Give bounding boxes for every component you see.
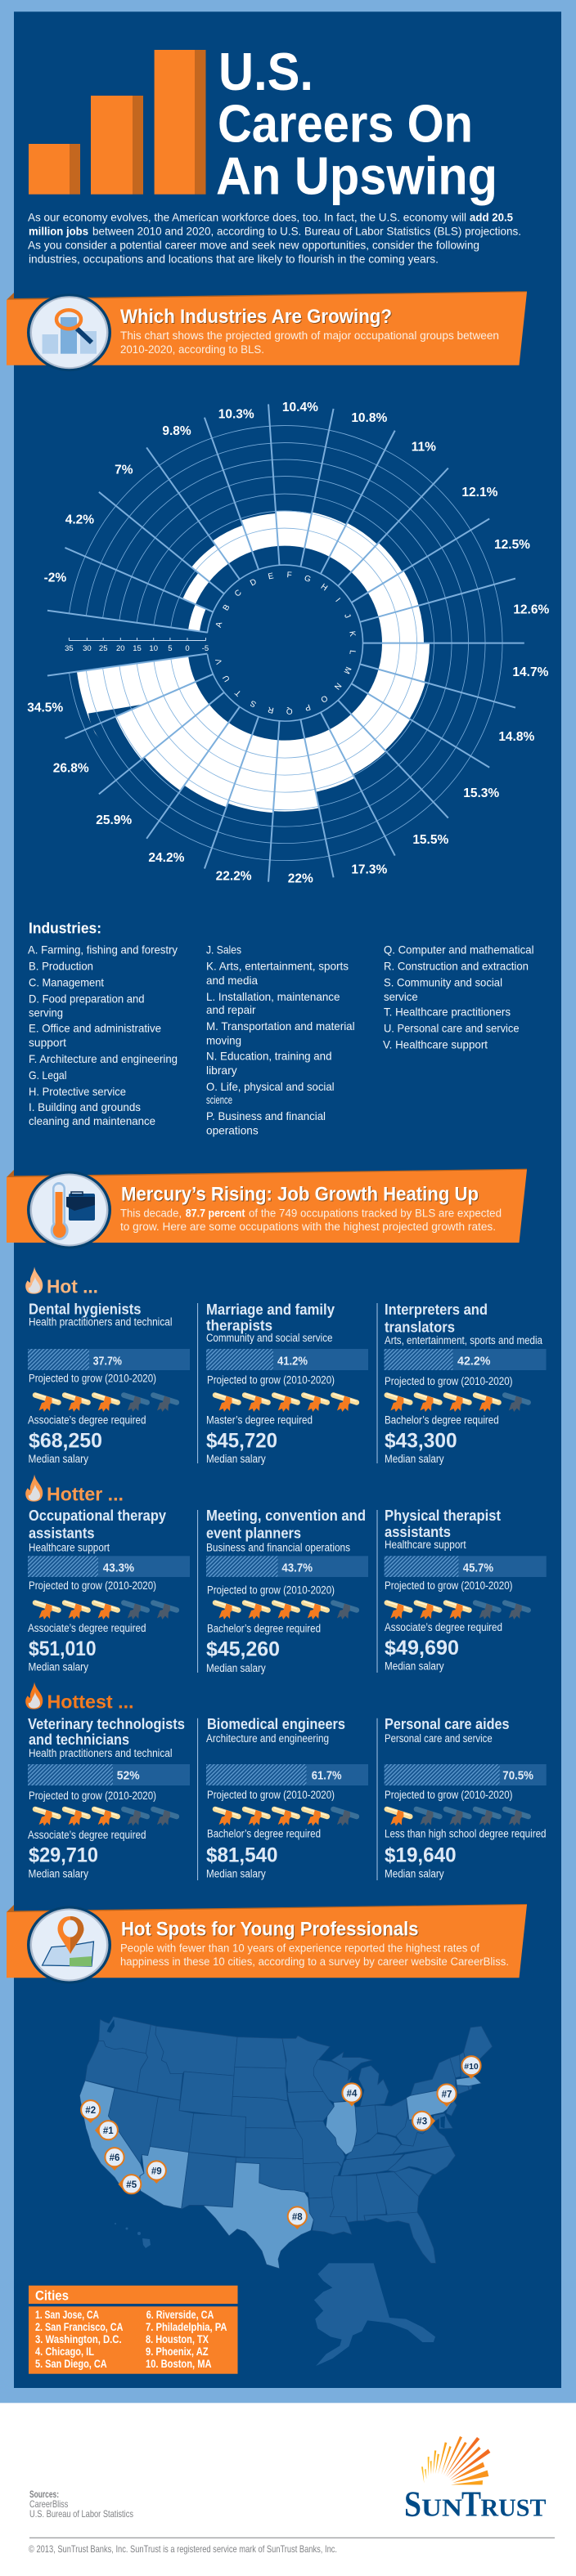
banner text (120, 1207, 502, 1233)
Alaska (314, 2263, 435, 2366)
card: marriage and family therapists: Community and social service (206, 1332, 332, 1344)
card: personal care aides: Projected to grow (2010-2020) (385, 1789, 512, 1801)
section heading: hot: Hot ... (47, 1276, 98, 1297)
percent labels: 34.5% (27, 701, 63, 715)
card: personal care aides: Median salary (385, 1868, 444, 1880)
legend column 3: service (384, 990, 418, 1003)
card: veterinary technologists and technicians: and technicians (29, 1732, 129, 1748)
legend column 2: L. Installation, maintenance (206, 990, 340, 1003)
chart scale axis: 15 (133, 644, 142, 653)
card: personal care aides: 70.5% (502, 1769, 533, 1783)
card: marriage and family therapists: Master’s degree required (206, 1414, 313, 1427)
legend column 3 (383, 943, 533, 1051)
card: marriage and family therapists: Marriage and family (206, 1301, 335, 1318)
legend column 2: science (206, 1093, 232, 1106)
legend column 2: K. Arts, entertainment, sports (206, 960, 349, 973)
percent labels: -2% (44, 571, 66, 585)
percent labels: 17.3% (351, 862, 387, 876)
card: marriage and family therapists (206, 1301, 368, 1465)
column dividers: hot (198, 1303, 377, 1463)
legend column 2: J. Sales (206, 943, 241, 956)
card: veterinary technologists and technicians (28, 1716, 190, 1880)
card: meeting, convention and event planners: Business and financial operations (206, 1541, 350, 1553)
section heading: hot (25, 1267, 98, 1297)
card: occupational therapy assistants: Projected to grow (2010-2020) (29, 1579, 156, 1592)
chart scale axis: 35 (65, 644, 74, 653)
sunburst (421, 2436, 490, 2484)
section heading: hotter: Hotter ... (47, 1484, 124, 1505)
card: veterinary technologists and technicians: Projected to grow (2010-2020) (29, 1790, 156, 1802)
percent labels: 12.6% (513, 603, 549, 617)
card: personal care aides: $19,640 (385, 1844, 457, 1866)
card: dental hygienists: Dental hygienists (29, 1301, 141, 1318)
card: interpreters and translators: Bachelor’s degree required (385, 1414, 499, 1427)
map pins: #9 (151, 2166, 162, 2176)
card: biomedical engineers: Architecture and engineering (206, 1732, 329, 1745)
heading: Hot Spots for Young Professionals (121, 1918, 419, 1940)
city list: 6. Riverside, CA (146, 2308, 214, 2321)
icon: flame (25, 1475, 43, 1502)
card: meeting, convention and event planners: 43.7% (281, 1561, 313, 1575)
card: physical therapist assistants: Projected to grow (2010-2020) (385, 1579, 512, 1592)
legend column 2: N. Education, training and (206, 1050, 332, 1063)
intro text (28, 211, 521, 266)
sector letters: T (233, 688, 243, 697)
legend column 1: support (29, 1036, 66, 1049)
percent labels: 15.5% (412, 833, 448, 847)
card: physical therapist assistants: Healthcare support (385, 1539, 466, 1551)
city list: 3. Washington, D.C. (35, 2332, 122, 2345)
legend column 2 (206, 943, 355, 1136)
sector letters: I (333, 597, 342, 604)
card: physical therapist assistants: Median salary (385, 1660, 444, 1673)
legend column 1: A. Farming, fishing and forestry (28, 943, 178, 956)
map pins: #1 (103, 2126, 114, 2136)
section heading: hotter (25, 1475, 124, 1505)
banner: hot spots (7, 1904, 527, 1983)
card: marriage and family therapists: $45,720 (206, 1430, 277, 1453)
icon: thermometer and briefcase (27, 1171, 111, 1249)
chart scale axis: 10 (149, 644, 158, 653)
intro text: industries, occupations and locations that are likely to flourish in the coming years. (29, 253, 439, 266)
card: occupational therapy assistants: Occupational therapy (29, 1508, 166, 1524)
legend column 3: R. Construction and extraction (384, 960, 529, 973)
legend column 1: serving (29, 1006, 63, 1019)
sector letters: U (222, 674, 232, 683)
legend column 1: G. Legal (29, 1068, 67, 1082)
percent labels: 12.5% (494, 538, 530, 552)
sector letters: A (214, 620, 224, 629)
map pins: #4 (347, 2089, 358, 2099)
banner text: of the 749 occupations tracked by BLS are expected (249, 1207, 502, 1219)
banner text: This chart shows the projected growth of major occupational groups between (120, 329, 499, 342)
title (216, 42, 497, 205)
card: interpreters and translators (385, 1301, 547, 1465)
wordmark: T (461, 2484, 481, 2524)
icon: magnifier over bars (27, 293, 111, 371)
legend column 1: C. Management (29, 976, 104, 989)
card: meeting, convention and event planners: Bachelor’s degree required (207, 1623, 321, 1635)
card: dental hygienists: 37.7% (93, 1354, 122, 1368)
chart scale axis: 30 (83, 644, 92, 653)
card: occupational therapy assistants: Median salary (28, 1660, 88, 1673)
heading: Mercury’s Rising: Job Growth Heating Up (121, 1183, 479, 1205)
chart scale axis: 25 (99, 644, 107, 653)
sector letters: Q (286, 706, 293, 715)
footer rule (29, 2537, 555, 2538)
chart scale axis (65, 638, 209, 653)
card: meeting, convention and event planners: Projected to grow (2010-2020) (207, 1584, 335, 1596)
column dividers: hottest (198, 1718, 377, 1880)
card: dental hygienists: Health practitioners and technical (29, 1316, 172, 1328)
city list: 1. San Jose, CA (35, 2308, 99, 2321)
card: biomedical engineers (206, 1716, 368, 1880)
card: occupational therapy assistants: 43.3% (103, 1561, 134, 1575)
percent labels: 12.1% (461, 486, 498, 500)
percent labels: 15.3% (463, 786, 499, 800)
sector letters: N (332, 681, 343, 691)
legend column 3: Q. Computer and mathematical (384, 943, 533, 956)
section heading: hottest (25, 1682, 133, 1712)
cities legend (29, 2286, 237, 2374)
legend column 1: E. Office and administrative (29, 1022, 161, 1035)
percent labels: 11% (412, 440, 436, 454)
card: biomedical engineers: Biomedical engineers (207, 1716, 345, 1732)
card: biomedical engineers: Bachelor’s degree required (207, 1828, 321, 1840)
sector letters: G (303, 574, 313, 585)
icon: flame (25, 1267, 43, 1294)
banner text (120, 1942, 509, 1968)
card: biomedical engineers: $81,540 (206, 1844, 278, 1866)
percent labels (27, 401, 549, 886)
banner text: People with fewer than 10 years of experience reported the highest rates of (120, 1942, 479, 1954)
sector letters: L (347, 649, 357, 656)
city list: 7. Philadelphia, PA (146, 2320, 227, 2333)
card: interpreters and translators: 42.2% (457, 1354, 491, 1368)
card: meeting, convention and event planners (206, 1508, 368, 1674)
card: interpreters and translators: Median salary (385, 1453, 444, 1465)
intro text: between 2010 and 2020, according to U.S. Bureau of Labor Statistics (BLS) projections. (92, 225, 521, 238)
percent labels: 10.4% (282, 401, 318, 414)
card: physical therapist assistants: assistants (385, 1524, 451, 1540)
legend column 2: operations (206, 1123, 259, 1136)
sources: CareerBliss (29, 2498, 68, 2510)
title: U.S. (218, 42, 313, 101)
legend column 3: S. Community and social (384, 976, 502, 989)
percent labels: 10.3% (218, 407, 254, 422)
map pins: #10 (464, 2062, 479, 2072)
percent labels: 26.8% (53, 762, 89, 776)
card: dental hygienists: $68,250 (29, 1430, 102, 1453)
card: veterinary technologists and technicians: Health practitioners and technical (29, 1747, 172, 1759)
city list: 10. Boston, MA (146, 2357, 212, 2370)
card: personal care aides: Personal care aides (385, 1716, 510, 1732)
Hawaii (115, 2223, 151, 2248)
sources: Sources: (29, 2489, 59, 2500)
card: veterinary technologists and technicians: $29,710 (29, 1844, 98, 1866)
card: occupational therapy assistants: Healthcare support (29, 1541, 110, 1553)
card: interpreters and translators: translators (385, 1319, 455, 1335)
map pins: #7 (442, 2090, 452, 2099)
percent labels: 22.2% (216, 870, 252, 883)
sector letters: V (214, 657, 224, 665)
legend column 2: M. Transportation and material (206, 1019, 355, 1033)
card: occupational therapy assistants (28, 1508, 190, 1673)
card: biomedical engineers: 61.7% (312, 1769, 342, 1783)
legend heading: Industries: (29, 921, 101, 937)
percent labels: 14.8% (498, 730, 534, 744)
legend column 2: and media (206, 974, 258, 987)
card: dental hygienists: Median salary (28, 1453, 88, 1465)
card: interpreters and translators: $43,300 (385, 1430, 457, 1453)
legend column 1: H. Protective service (29, 1085, 126, 1098)
percent labels: 7% (115, 463, 133, 477)
legend column 1: F. Architecture and engineering (29, 1052, 178, 1065)
card: marriage and family therapists: Projected to grow (2010-2020) (207, 1374, 335, 1387)
percent labels: 9.8% (162, 424, 191, 438)
sector letters: S (249, 698, 258, 709)
wordmark (404, 2484, 547, 2524)
card: meeting, convention and event planners: Median salary (206, 1662, 266, 1674)
legend column 3: V. Healthcare support (383, 1038, 488, 1051)
card: dental hygienists: Projected to grow (2010-2020) (29, 1373, 156, 1385)
card: marriage and family therapists: Median salary (206, 1453, 266, 1465)
wordmark: RUST (481, 2493, 547, 2521)
card: physical therapist assistants: Associate’s degree required (385, 1621, 502, 1633)
map pins: #8 (292, 2212, 303, 2222)
icon: map pin (27, 1906, 111, 1983)
card: veterinary technologists and technicians: Associate’s degree required (28, 1829, 146, 1841)
card: physical therapist assistants (385, 1508, 547, 1673)
sources (29, 2489, 133, 2520)
banner text: to grow. Here are some occupations with the highest projected growth rates. (120, 1221, 496, 1233)
card: dental hygienists (28, 1301, 190, 1465)
card: veterinary technologists and technicians: Median salary (28, 1868, 88, 1880)
card: interpreters and translators: Interpreters and (385, 1301, 488, 1318)
wordmark: UN (421, 2493, 462, 2521)
legend column 1: D. Food preparation and (29, 992, 144, 1006)
sector letters: H (319, 582, 329, 593)
legend column 2: P. Business and financial (206, 1109, 326, 1122)
card: marriage and family therapists: therapists (206, 1317, 272, 1333)
sector letters: R (267, 705, 275, 715)
logo: SunTrust (404, 2436, 547, 2524)
legend column 1: B. Production (29, 960, 93, 973)
copyright: © 2013, SunTrust Banks, Inc. SunTrust is a registered service mark of SunTrust Banks, Inc. (29, 2543, 337, 2555)
intro text: million jobs (29, 225, 88, 238)
sector letters: K (347, 630, 357, 638)
card: personal care aides (385, 1716, 547, 1880)
radial bar chart (27, 398, 549, 888)
sector letters: C (233, 588, 244, 598)
card: interpreters and translators: Arts, entertainment, sports and media (385, 1334, 542, 1346)
card: marriage and family therapists: 41.2% (277, 1354, 308, 1368)
city list (35, 2308, 227, 2370)
legend column 1: I. Building and grounds (29, 1100, 141, 1113)
card: physical therapist assistants: $49,690 (385, 1637, 459, 1660)
legend column 1 (28, 943, 178, 1127)
map pins: #3 (416, 2117, 427, 2127)
sector letters: J (342, 612, 352, 620)
section heading: hottest: Hottest ... (47, 1691, 134, 1712)
column dividers: hotter (198, 1510, 377, 1673)
city list: 9. Phoenix, AZ (146, 2345, 209, 2358)
percent labels: 14.7% (512, 665, 549, 679)
card: interpreters and translators: Projected to grow (2010-2020) (385, 1375, 512, 1387)
percent labels: 22% (288, 871, 313, 886)
sources: U.S. Bureau of Labor Statistics (29, 2508, 133, 2520)
card: veterinary technologists and technicians: Veterinary technologists (28, 1716, 185, 1732)
percent labels: 10.8% (351, 411, 387, 425)
card: occupational therapy assistants: assistants (29, 1525, 95, 1542)
card: personal care aides: Personal care and service (385, 1732, 493, 1745)
industries legend (28, 921, 533, 1136)
wordmark: S (404, 2484, 421, 2524)
legend column 1: cleaning and maintenance (29, 1114, 155, 1127)
sector letters (214, 571, 357, 715)
intro text: As you consider a potential career move and seek new opportunities, consider the following (28, 239, 479, 252)
card: occupational therapy assistants: $51,010 (29, 1637, 97, 1660)
intro text: add 20.5 (470, 211, 513, 224)
city list: 8. Houston, TX (146, 2332, 209, 2345)
sector letters: B (222, 603, 232, 612)
map pins: #6 (110, 2153, 119, 2163)
card: biomedical engineers: Median salary (206, 1868, 266, 1880)
card: physical therapist assistants: Physical therapist (385, 1508, 501, 1524)
title: Careers On (218, 93, 473, 153)
legend column 2: moving (206, 1033, 241, 1046)
banner text: This decade, (120, 1207, 182, 1219)
card: meeting, convention and event planners: Meeting, convention and (206, 1508, 366, 1524)
heading: Which Industries Are Growing? (120, 306, 392, 328)
percent labels: 24.2% (148, 851, 185, 865)
chart scale axis: 20 (116, 644, 125, 653)
sector letters: E (268, 571, 275, 581)
legend heading: Cities (35, 2287, 69, 2303)
chart scale axis: 5 (168, 644, 173, 653)
banner text: happiness in these 10 cities, according to a survey by career website CareerBliss. (120, 1956, 509, 1968)
title: An Upswing (216, 146, 497, 205)
card: personal care aides: Less than high school degree required (385, 1828, 547, 1840)
header bar chart icon (29, 50, 206, 195)
card: veterinary technologists and technicians: 52% (117, 1769, 140, 1783)
percent labels: 4.2% (65, 513, 94, 526)
sector letters: D (249, 577, 259, 588)
chart scale axis: 0 (185, 644, 190, 653)
map pins: #5 (126, 2180, 137, 2190)
chart scale axis: -5 (202, 644, 209, 653)
banner text: 87.7 percent (186, 1207, 245, 1219)
map pins (81, 2056, 481, 2229)
legend column 3: U. Personal care and service (384, 1022, 520, 1035)
icon: flame (25, 1682, 43, 1709)
city list: 5. San Diego, CA (35, 2357, 107, 2370)
map pins: #2 (85, 2106, 96, 2116)
legend column 3: T. Healthcare practitioners (384, 1006, 511, 1019)
card: meeting, convention and event planners: $45,260 (206, 1638, 280, 1661)
US map (79, 2017, 493, 2366)
intro text: As our economy evolves, the American workforce does, too. In fact, the U.S. economy will (28, 211, 466, 224)
card: occupational therapy assistants: Associate’s degree required (28, 1622, 146, 1634)
banner text: 2010-2020, according to BLS. (120, 343, 264, 356)
card: physical therapist assistants: 45.7% (463, 1561, 493, 1575)
sector letters: M (341, 665, 353, 675)
card: meeting, convention and event planners: event planners (206, 1525, 301, 1542)
banner: which industries are growing (7, 291, 527, 371)
card: dental hygienists: Associate’s degree required (28, 1414, 146, 1427)
percent labels: 25.9% (96, 813, 132, 827)
legend column 2: and repair (206, 1003, 256, 1016)
banner: mercury's rising (7, 1169, 527, 1249)
legend column 2: O. Life, physical and social (206, 1080, 335, 1093)
sector letters: F (286, 571, 292, 580)
sector letters: O (318, 693, 329, 704)
city list: 4. Chicago, IL (35, 2345, 94, 2358)
legend column 2: library (206, 1064, 237, 1077)
city list: 2. San Francisco, CA (35, 2320, 123, 2333)
sector letters: P (304, 702, 312, 712)
card: biomedical engineers: Projected to grow (2010-2020) (207, 1789, 335, 1801)
banner text (120, 329, 499, 356)
